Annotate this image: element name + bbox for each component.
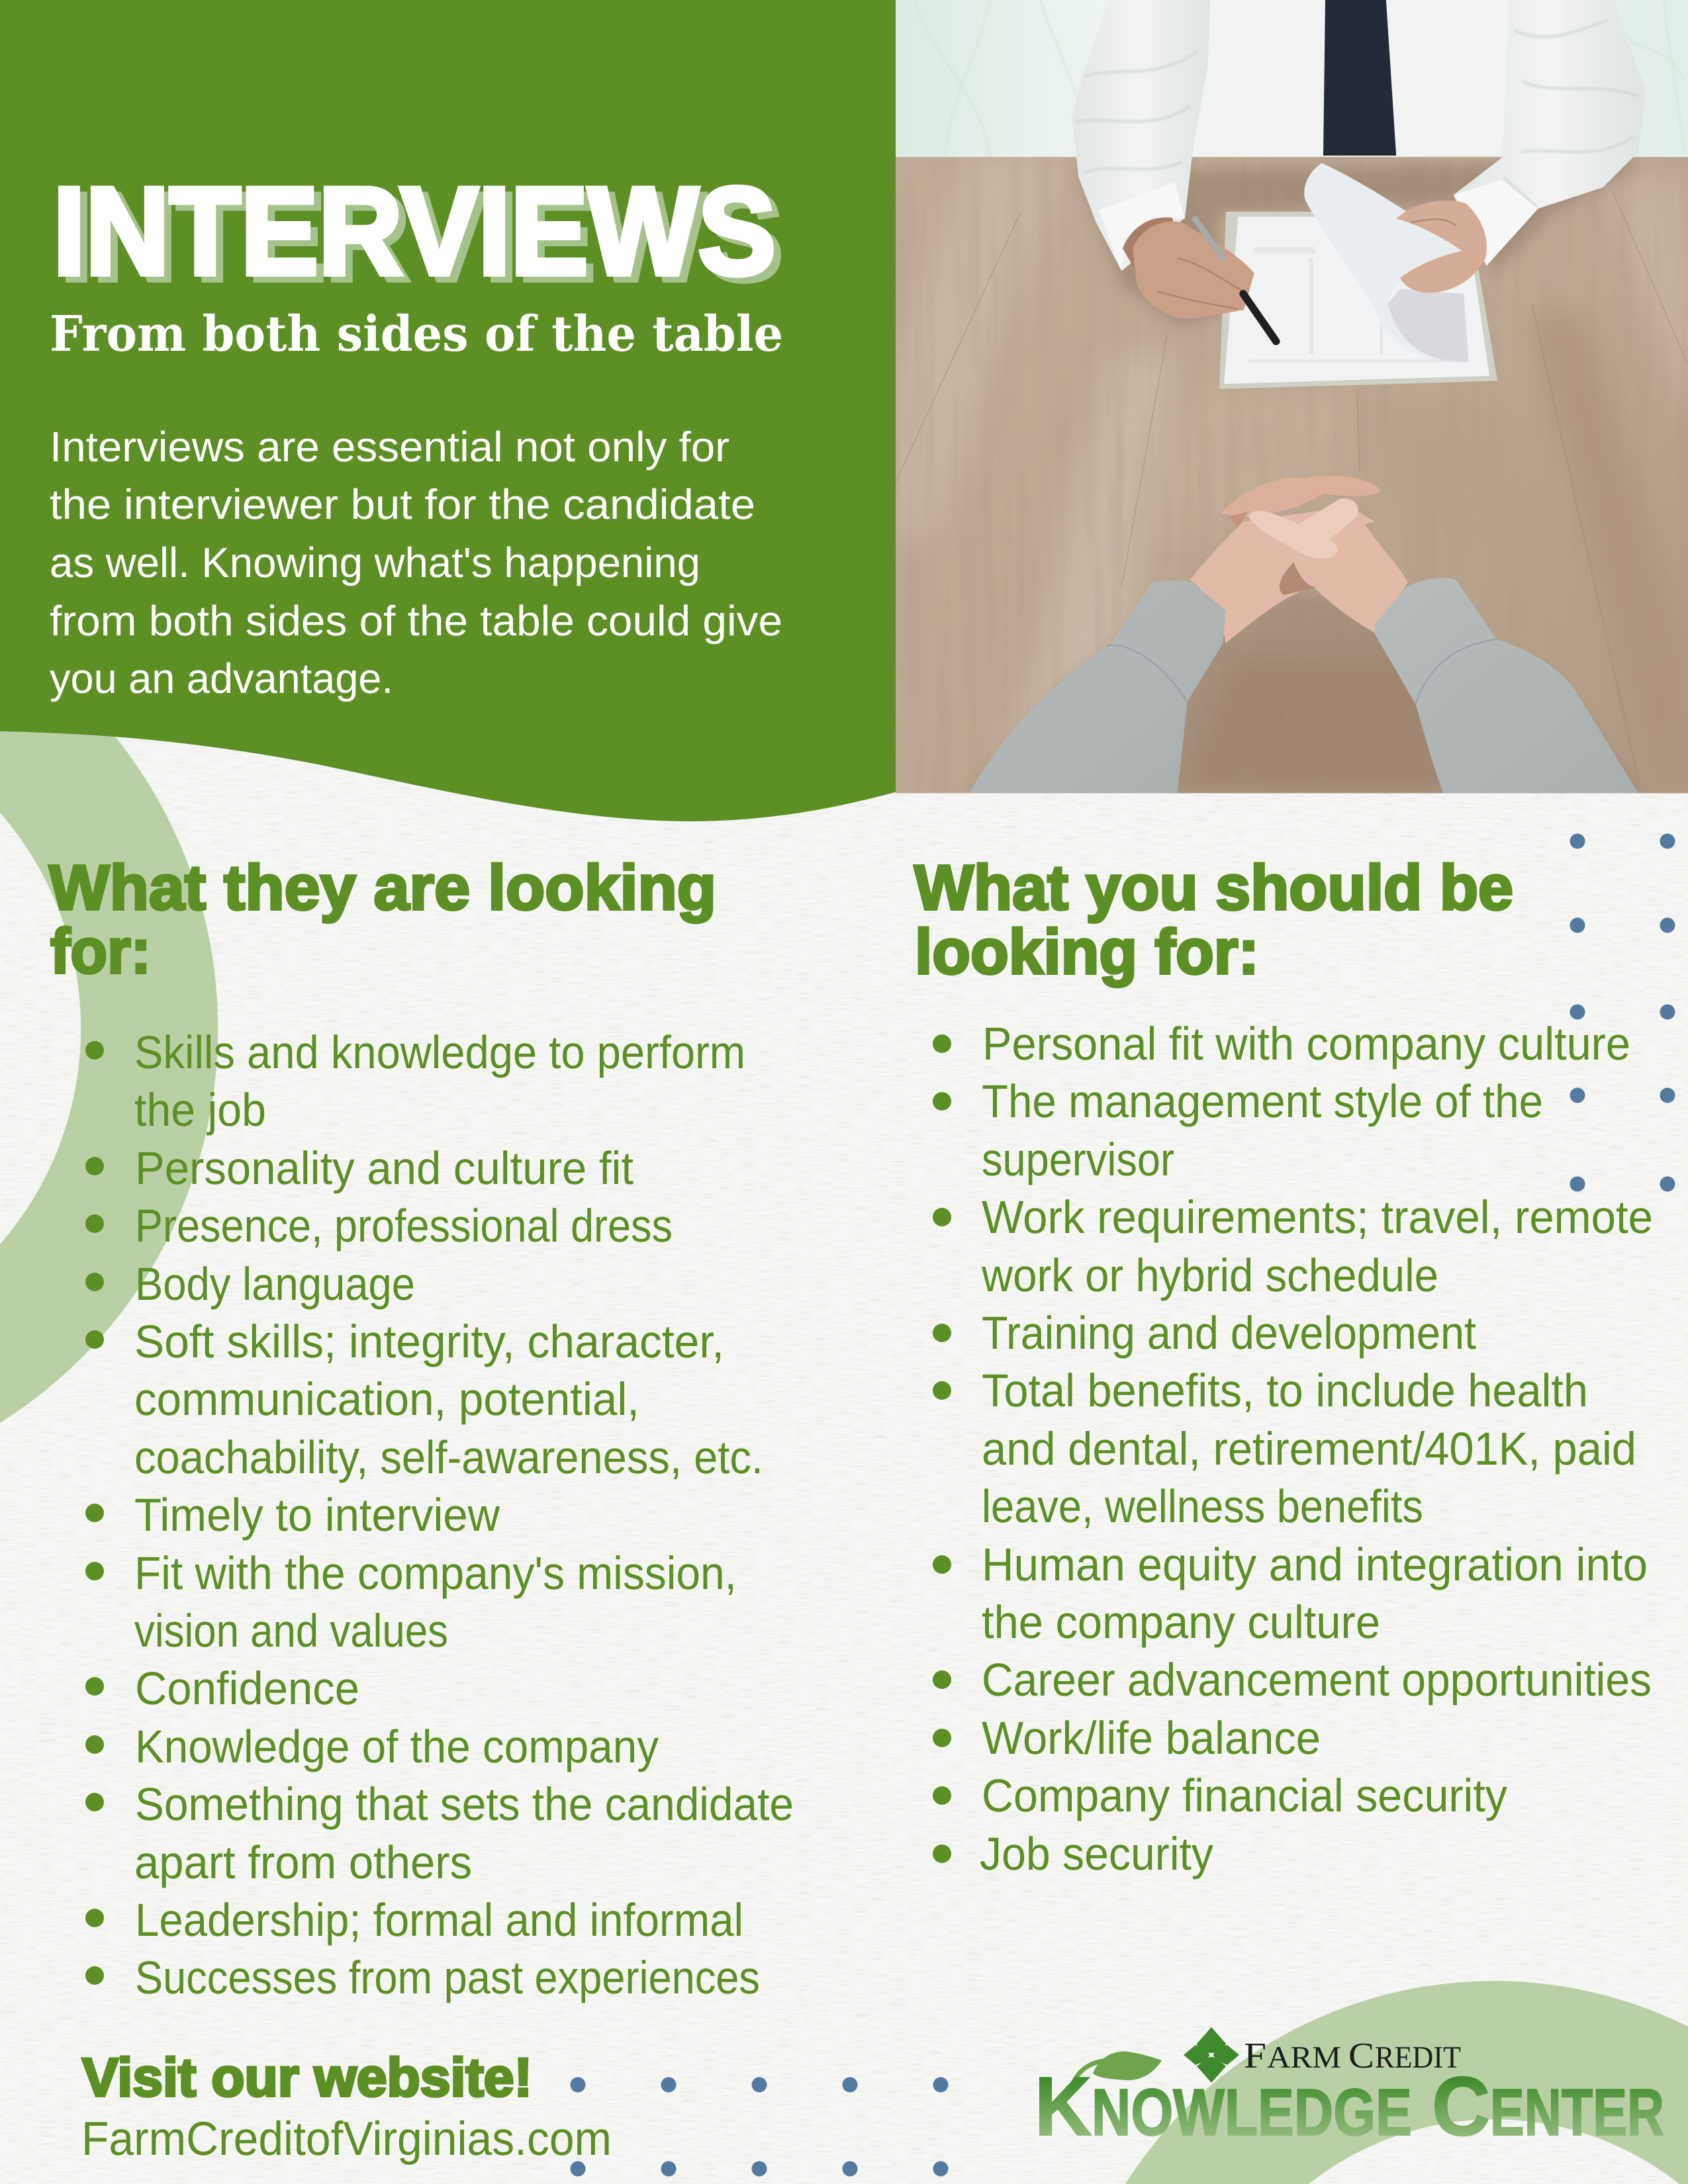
item: training: Training and development <box>982 1307 1476 1359</box>
decorative ring: bottom right <box>1125 1981 1688 2184</box>
item: financial security: Company financial security <box>982 1770 1507 1821</box>
item: work requirements: work or hybrid schedule <box>981 1250 1438 1301</box>
item: total benefits: Total benefits, to include health <box>982 1365 1588 1416</box>
item: management style: supervisor <box>982 1134 1174 1185</box>
item: something that sets apart: Something that sets the candidate <box>135 1778 794 1830</box>
heading: what they are looking for <box>49 852 716 987</box>
dot grid: bottom <box>571 2077 948 2176</box>
item: total benefits: leave, wellness benefits <box>982 1480 1423 1532</box>
Knowledge Center wordmark: K <box>1035 2060 1092 2153</box>
Farm Credit wordmark <box>1244 2035 1461 2075</box>
plank seams <box>894 193 1688 780</box>
shadow under lower arms <box>970 592 1644 793</box>
lower hands <box>1190 476 1408 643</box>
item: personality: Personality and culture fit <box>135 1142 633 1194</box>
item: management style <box>933 1075 1543 1185</box>
item: soft skills <box>85 1316 763 1483</box>
item: skills: Skills and knowledge to perform <box>134 1026 745 1078</box>
left cuff <box>1099 183 1185 271</box>
item: successes: Successes from past experiences <box>135 1952 760 2003</box>
item: work requirements <box>933 1191 1653 1301</box>
curtain pattern <box>961 1 1674 128</box>
item: total benefits <box>933 1365 1636 1532</box>
item: presence: Presence, professional dress <box>135 1200 673 1251</box>
intro paragraph: Interviews are essential not only for <box>50 423 729 471</box>
Knowledge Center wordmark <box>1035 2060 1664 2153</box>
title: INTERVIEWS: INTERVIEWS <box>60 167 783 306</box>
title: INTERVIEWS: INTERVIEWS <box>53 161 776 300</box>
item: total benefits: and dental, retirement/401K, paid <box>982 1423 1636 1475</box>
item: skills: the job <box>134 1084 266 1136</box>
icon: leaf <box>1072 2052 1162 2086</box>
item: something that sets apart <box>85 1778 794 1888</box>
item: something that sets apart: apart from others <box>134 1837 472 1888</box>
sleeve folds <box>1106 639 1497 704</box>
item: human equity: Human equity and integration into <box>982 1539 1648 1590</box>
wood tones <box>894 157 1688 793</box>
right hand <box>1396 201 1487 293</box>
tie <box>1323 0 1396 156</box>
heading: what they are looking for: What they are looking <box>49 852 716 923</box>
decorative ring: left <box>0 634 218 1423</box>
item: management style: The management style of the <box>982 1075 1543 1127</box>
right grey sleeve <box>1375 578 1638 793</box>
item: confidence: Confidence <box>135 1662 359 1714</box>
item: mission fit: Fit with the company's mission, <box>134 1547 737 1599</box>
intro paragraph: the interviewer but for the candidate <box>50 480 755 528</box>
item: job security: Job security <box>980 1828 1213 1880</box>
item: soft skills: Soft skills; integrity, character, <box>134 1316 724 1367</box>
intro paragraph: you an advantage. <box>50 655 393 702</box>
arm shadow <box>1078 162 1644 324</box>
left hand <box>1133 221 1254 318</box>
table top <box>894 157 1688 796</box>
intro paragraph <box>50 423 782 702</box>
logo: Farm Credit Knowledge Center <box>1035 2027 1664 2153</box>
wall background <box>894 0 1688 158</box>
left grey sleeve <box>970 580 1225 793</box>
hand creases <box>1157 219 1456 309</box>
left sleeve <box>1072 0 1210 271</box>
item: mission fit <box>85 1547 737 1657</box>
heading: what you should be looking for <box>914 852 1513 987</box>
subtitle: From both sides of the table <box>50 306 783 363</box>
item: work requirements: Work requirements; travel, remote <box>982 1191 1653 1243</box>
Farm Credit wordmark: ARM <box>1267 2040 1341 2075</box>
right sleeve <box>1454 0 1646 266</box>
intro paragraph: as well. Knowing what's happening <box>50 539 700 586</box>
list: what they are looking for <box>85 1026 794 2003</box>
paper stack <box>1224 217 1489 384</box>
panel: green header <box>0 0 898 821</box>
Farm Credit wordmark: F <box>1244 2035 1266 2075</box>
item: career advancement: Career advancement opportunities <box>982 1654 1652 1706</box>
dot grid: top right <box>1570 834 1675 1191</box>
folder of papers <box>1219 212 1497 389</box>
heading: what you should be looking for: looking for: <box>915 917 1259 987</box>
resume lines <box>1248 247 1461 362</box>
Farm Credit wordmark: REDIT <box>1375 2040 1461 2075</box>
Knowledge Center wordmark: C <box>1432 2060 1490 2153</box>
heading: what they are looking for: for: <box>50 916 151 987</box>
photo: interview across a table <box>894 0 1688 796</box>
wood grain <box>1116 157 1340 561</box>
Knowledge Center wordmark: NOWLEDGE <box>1092 2075 1412 2150</box>
item: leadership: Leadership; formal and informal <box>135 1894 743 1946</box>
Farm Credit wordmark: C <box>1348 2035 1374 2075</box>
left wrist <box>1123 218 1178 273</box>
call to action: visit our website: Visit our website! <box>82 2048 532 2108</box>
heading: what you should be looking for: What you should be <box>914 852 1513 923</box>
item: company knowledge: Knowledge of the company <box>135 1721 659 1772</box>
shirt wrinkles <box>1076 21 1638 208</box>
item: mission fit: vision and values <box>134 1605 448 1657</box>
item: human equity: the company culture <box>982 1596 1380 1648</box>
pen <box>1195 219 1276 341</box>
icon: Farm Credit diamond <box>1184 2027 1239 2083</box>
item: human equity <box>933 1539 1648 1648</box>
item: body language: Body language <box>135 1258 415 1310</box>
item: soft skills: communication, potential, <box>134 1373 639 1425</box>
item: work life balance: Work/life balance <box>982 1712 1321 1764</box>
right cuff <box>1454 180 1538 266</box>
curled page <box>1304 163 1469 362</box>
item: skills <box>85 1026 745 1136</box>
website address: FarmCreditofVirginias.com <box>81 2113 612 2165</box>
intro paragraph: from both sides of the table could give <box>50 597 782 645</box>
item: personal fit: Personal fit with company culture <box>982 1018 1630 1069</box>
item: soft skills: coachability, self-awareness, etc. <box>134 1432 763 1483</box>
list: what you should be looking for <box>933 1018 1653 1880</box>
item: timely: Timely to interview <box>134 1489 500 1541</box>
torso and shirt <box>1390 0 1508 156</box>
curled page underside <box>1387 289 1469 362</box>
